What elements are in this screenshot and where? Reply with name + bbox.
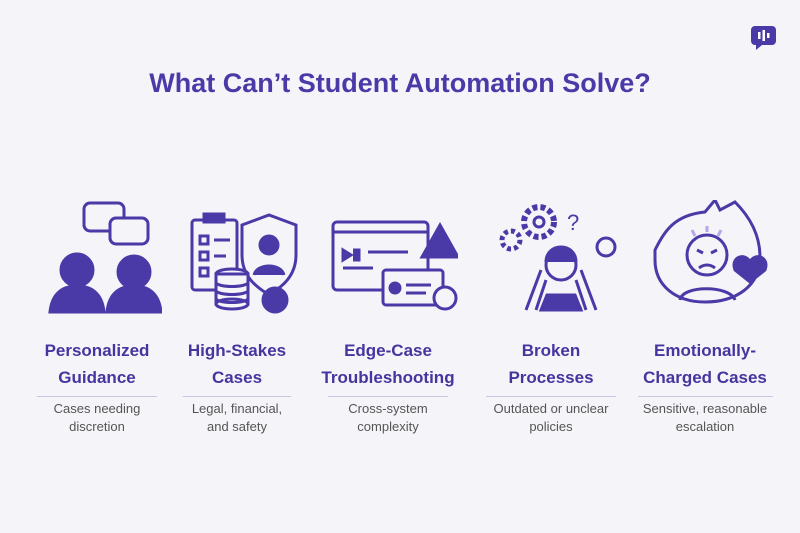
heading xyxy=(643,341,767,387)
icon: two people with speech bubbles xyxy=(48,202,162,314)
icon: windows with warning xyxy=(332,220,458,310)
heading xyxy=(321,341,455,387)
description: Legal, financial, and safety xyxy=(192,401,282,434)
heading: Emotionally- xyxy=(654,341,756,360)
title: What Can’t Student Automation Solve? xyxy=(149,68,651,98)
description: Sensitive, reasonable escalation xyxy=(643,401,767,434)
heading: Cases xyxy=(212,368,262,387)
heading xyxy=(188,341,286,387)
description: Cases needing discretion xyxy=(54,401,140,434)
icon: stressed person with gears xyxy=(500,204,616,312)
icon: upset person with heart xyxy=(654,200,768,304)
panel: high-stakes xyxy=(183,212,298,434)
heading: Processes xyxy=(508,368,594,387)
description xyxy=(183,396,291,436)
heading: Guidance xyxy=(58,368,136,387)
panel: edge-case troubleshooting xyxy=(321,220,458,434)
icon: clipboard shield coins xyxy=(190,212,298,314)
heading: Edge-Case xyxy=(344,341,432,360)
heading: Troubleshooting xyxy=(321,368,455,387)
panel: emotionally-charged cases xyxy=(638,200,773,434)
heading: High-Stakes xyxy=(188,341,286,360)
heading xyxy=(45,341,149,387)
panel: personalized guidance xyxy=(37,202,162,434)
heading: Personalized xyxy=(45,341,149,360)
logo icon xyxy=(751,26,776,50)
heading: Broken xyxy=(522,341,580,360)
heading: Charged Cases xyxy=(643,368,767,387)
panel: broken processes xyxy=(486,204,616,434)
description xyxy=(328,396,448,436)
description: Cross-system complexity xyxy=(348,401,428,434)
description xyxy=(37,396,157,436)
heading xyxy=(508,341,594,387)
description: Outdated or unclear policies xyxy=(494,401,608,434)
icon: stressed person with gears: ? xyxy=(567,210,579,235)
